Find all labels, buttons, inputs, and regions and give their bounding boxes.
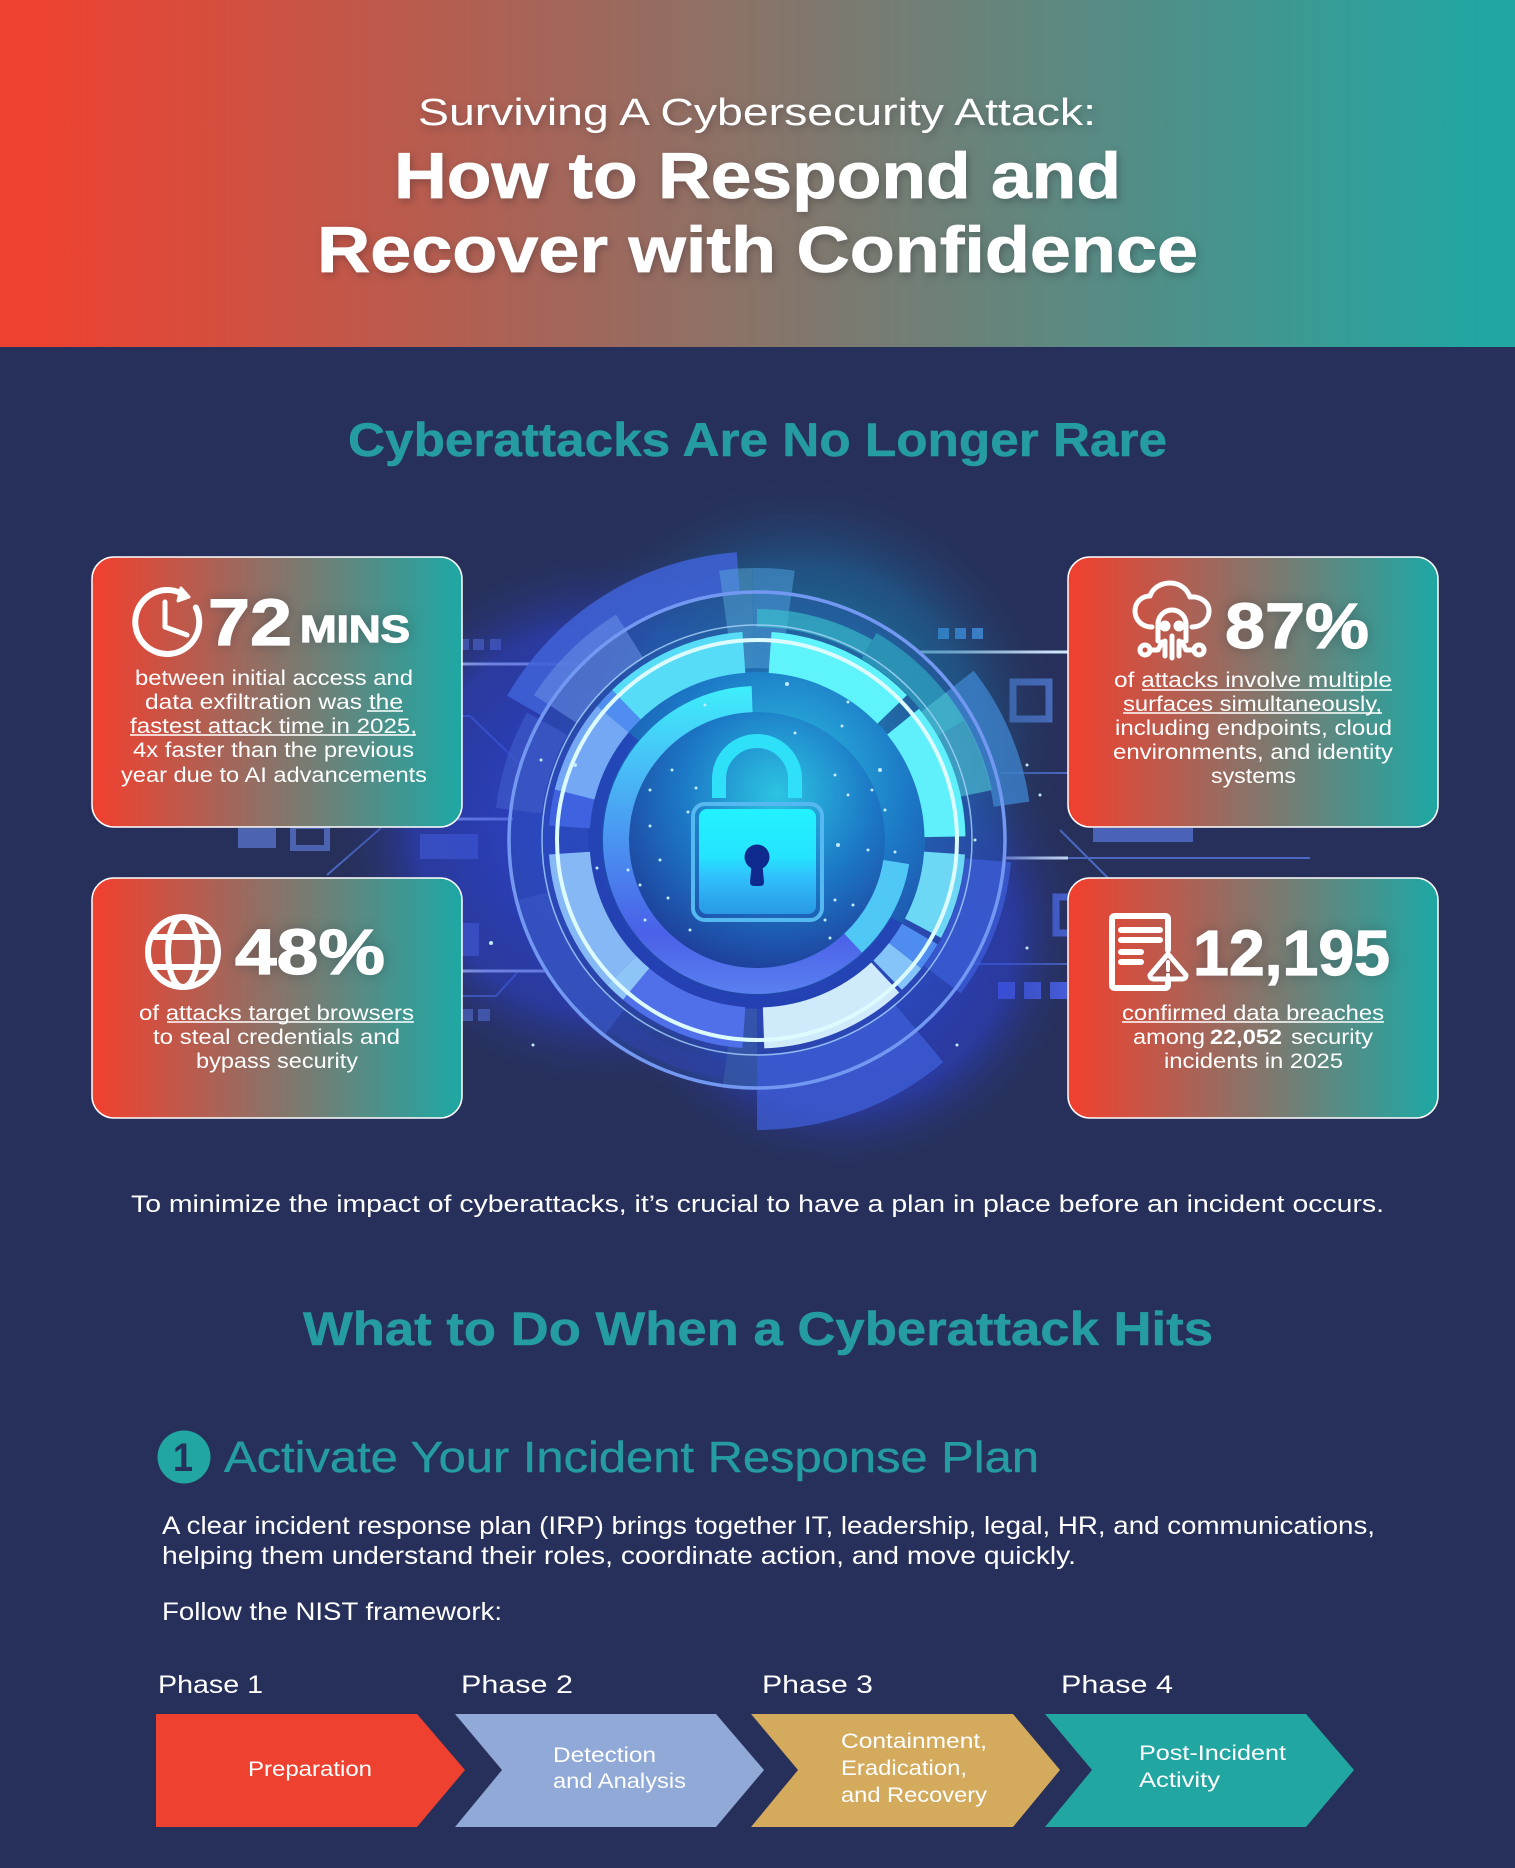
description: systems: [1211, 765, 1296, 788]
phase 2: and Analysis: [553, 1770, 686, 1793]
title: [317, 92, 1198, 286]
phase 3: and Recovery: [841, 1784, 988, 1807]
icon: document alert: [1112, 916, 1186, 988]
stat card: 72 mins: [92, 557, 462, 827]
stat card: 87%: [1068, 557, 1438, 827]
description: [139, 1002, 414, 1073]
icon: stopwatch clock: [135, 588, 199, 654]
description: 22,052: [1210, 1026, 1282, 1049]
description: security: [1291, 1026, 1374, 1049]
stat value: 72: [208, 585, 292, 659]
description: [1122, 1002, 1384, 1073]
phase 4: Post-Incident: [1139, 1742, 1286, 1765]
phase 3: [751, 1671, 1060, 1827]
description: fastest attack time in 2025,: [130, 715, 417, 738]
body text: A clear incident response plan (IRP) brings together IT, leadership, legal, HR, and communications,: [162, 1512, 1375, 1540]
phase 1: Phase 1: [158, 1671, 263, 1699]
NIST phases: [156, 1671, 1354, 1827]
icon: padlock: [693, 741, 822, 920]
number badge: 1: [173, 1436, 193, 1480]
glow: [330, 470, 1090, 1180]
stat value: [208, 585, 410, 659]
icon: globe: [148, 917, 218, 987]
phase 2: [455, 1671, 764, 1827]
description: bypass security: [196, 1050, 359, 1073]
title: Surviving A Cybersecurity Attack:: [418, 92, 1096, 134]
central padlock illustration: [330, 470, 1123, 1206]
description: [1113, 669, 1394, 788]
description: of attacks target browsers: [139, 1002, 414, 1025]
statement text: To minimize the impact of cyberattacks, it’s crucial to have a plan in place before an incident occurs.: [131, 1191, 1384, 1218]
body text: [162, 1512, 1375, 1626]
description: incidents in 2025: [1164, 1050, 1343, 1073]
stat card: 12,195: [1068, 878, 1438, 1118]
description: [121, 667, 427, 787]
heading: What to Do When a Cyberattack Hits: What to Do When a Cyberattack Hits: [303, 1302, 1213, 1355]
title: How to Respond and: [394, 139, 1121, 212]
description: data exfiltration was the: [145, 691, 403, 714]
phase 3: Eradication,: [841, 1757, 967, 1780]
heading: Cyberattacks Are No Longer Rare: Cyberattacks Are No Longer Rare: [348, 413, 1167, 466]
number badge: [158, 1430, 210, 1484]
stat value: 12,195: [1193, 917, 1390, 989]
stat card: 48%: [92, 878, 462, 1118]
background circuit decorations: [238, 628, 1310, 1021]
phase 4: Activity: [1139, 1769, 1221, 1792]
body text: Follow the NIST framework:: [162, 1598, 502, 1626]
phase 1: [156, 1671, 465, 1827]
phase 3: Phase 3: [762, 1671, 873, 1699]
phase 2: Detection: [553, 1744, 656, 1767]
header banner: [0, 0, 1515, 347]
description: to steal credentials and: [153, 1026, 400, 1049]
phase 4: Phase 4: [1061, 1671, 1173, 1699]
description: environments, and identity: [1113, 741, 1394, 764]
step 1 heading: Activate Your Incident Response Plan: [224, 1433, 1039, 1482]
description: of attacks involve multiple: [1114, 669, 1392, 692]
phase 2: Phase 2: [461, 1671, 573, 1699]
description: confirmed data breaches: [1122, 1002, 1384, 1025]
concentric rings and segments: [391, 474, 1123, 1206]
description: between initial access and: [135, 667, 413, 690]
icon: cloud skull: [1135, 583, 1209, 658]
stat value: 87%: [1225, 590, 1369, 662]
title: Recover with Confidence: [317, 213, 1198, 286]
stat value: 48%: [235, 916, 385, 988]
phase 1: Preparation: [248, 1758, 372, 1781]
phase 3: Containment,: [841, 1730, 987, 1753]
body text: helping them understand their roles, coordinate action, and move quickly.: [162, 1542, 1076, 1570]
description: 4x faster than the previous: [133, 739, 414, 762]
description: surfaces simultaneously,: [1123, 693, 1382, 716]
phase 4: [1045, 1671, 1354, 1827]
description: among: [1133, 1026, 1205, 1049]
stat value: MINS: [300, 609, 410, 651]
description: including endpoints, cloud: [1115, 717, 1392, 740]
description: year due to AI advancements: [121, 764, 427, 787]
stars: [489, 682, 1042, 1046]
